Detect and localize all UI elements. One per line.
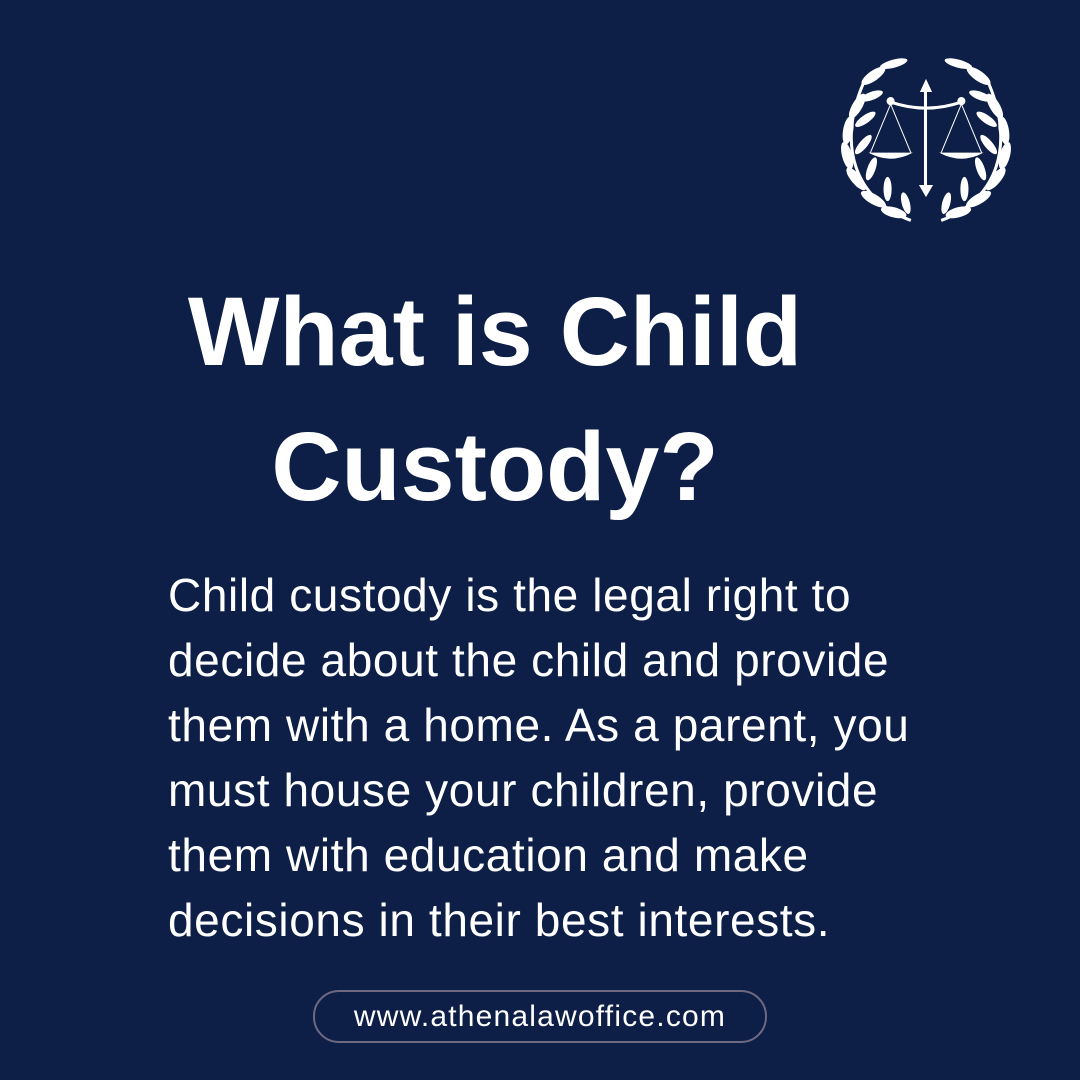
body text: them with a home. As a parent, you [168,699,909,751]
body text: decisions in their best interests. [168,894,830,946]
scales [868,79,984,197]
body text: decide about the child and provide [168,634,889,686]
website pill [313,990,767,1043]
title: Custody? [271,412,719,521]
title: What is Child [188,277,802,386]
title [188,277,802,521]
body text: them with education and make [168,829,809,881]
website pill: www.athenalawoffice.com [354,1000,726,1033]
body text: Child custody is the legal right to [168,569,851,621]
laurel left [839,56,913,221]
body text: must house your children, provide [168,764,878,816]
laurel right [939,56,1013,221]
body text [168,569,909,946]
logo: scales of justice with laurel wreath [841,58,1011,222]
